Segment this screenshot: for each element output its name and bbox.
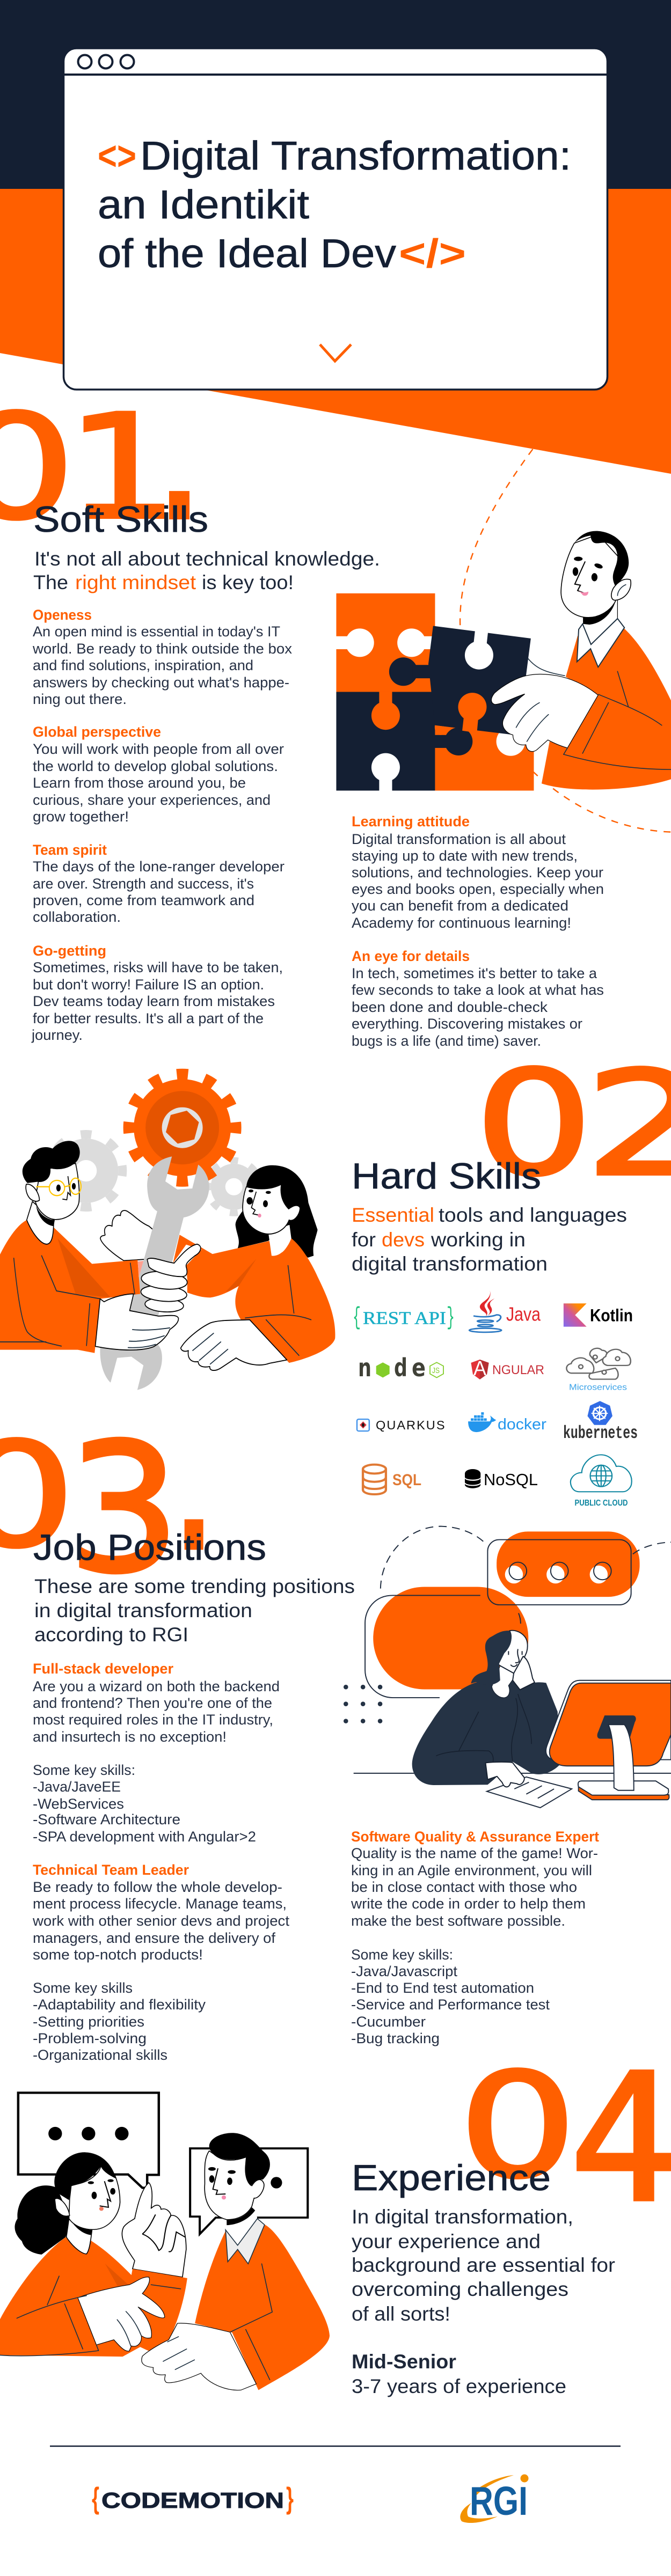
desk line bbox=[354, 1772, 671, 1774]
logo: kotlin: Kotlin bbox=[590, 1306, 633, 1325]
woman hand bbox=[486, 1762, 524, 1787]
icon: down chevron bbox=[320, 344, 351, 361]
block: team spirit bbox=[33, 842, 285, 925]
intro text: digital transformation bbox=[352, 1253, 548, 1275]
block: technical team leader: -Problem-solving bbox=[33, 2030, 147, 2046]
heading: experience: Experience bbox=[352, 2157, 551, 2198]
block: technical team leader: ment process lifecycle. Manage teams, bbox=[33, 1896, 287, 1912]
illustration: man with puzzle bbox=[335, 449, 671, 832]
raised hand bbox=[122, 2183, 186, 2277]
block: team spirit: proven, come from teamwork and bbox=[33, 892, 254, 908]
block: go-getting bbox=[31, 943, 283, 1043]
man neck bbox=[227, 2201, 257, 2245]
man neck shadow bbox=[227, 2207, 255, 2225]
woman sweater shadow bbox=[105, 2264, 132, 2287]
block: openess bbox=[32, 607, 293, 707]
block: openess: ning out there. bbox=[33, 691, 127, 707]
block: full-stack developer: Are you a wizard on both the backend bbox=[33, 1678, 280, 1694]
logo: docker: docker bbox=[498, 1416, 546, 1433]
intro text: right mindset bbox=[75, 571, 196, 593]
block: full-stack developer bbox=[33, 1661, 280, 1845]
block: global perspective: curious, share your experiences, and bbox=[33, 792, 271, 808]
gray gear left bbox=[49, 1134, 122, 1207]
intro text: is key too! bbox=[202, 571, 294, 593]
section number 01: . bbox=[154, 337, 205, 563]
man sweater bbox=[542, 628, 671, 790]
block: an eye for details: In tech, sometimes it's better to take a bbox=[352, 965, 597, 981]
logo: rest api: { bbox=[353, 1304, 361, 1332]
block: learning attitude: eyes and books open, especially when bbox=[352, 881, 604, 897]
man neck and collar bbox=[577, 600, 624, 667]
woman sleeve lines bbox=[0, 2276, 181, 2356]
block: technical team leader: some top-notch products! bbox=[33, 1947, 203, 1963]
block: software quality expert: write the code in order to help them bbox=[351, 1896, 586, 1912]
title text: <> bbox=[98, 133, 136, 178]
title text: an Identikit bbox=[98, 182, 309, 227]
block: full-stack developer: -SPA development with Angular>2 bbox=[33, 1829, 256, 1845]
back hand fingers bbox=[100, 1210, 154, 1260]
intro text: working in bbox=[431, 1229, 526, 1251]
block: software quality expert: king in an Agile environment, you will bbox=[351, 1862, 592, 1878]
block: openess: answers by checking out what's happe- bbox=[33, 674, 289, 691]
logo: sql: SQL bbox=[392, 1471, 421, 1489]
intro text: background are essential for bbox=[352, 2254, 615, 2276]
lower hand bbox=[95, 1294, 179, 1350]
title window bbox=[63, 48, 608, 390]
window buttons bbox=[78, 55, 134, 69]
logo: kubernetes: kubernetes bbox=[563, 1423, 638, 1443]
block: go-getting: journey. bbox=[31, 1027, 83, 1043]
woman hair bbox=[471, 1631, 512, 1685]
logo: microservices: Microservices bbox=[569, 1383, 627, 1392]
block: software quality expert: -Bug tracking bbox=[351, 2030, 440, 2046]
block: go-getting: Dev teams today learn from mistakes bbox=[33, 993, 275, 1009]
logo: rgi bbox=[460, 2475, 528, 2523]
intro text bbox=[34, 1575, 355, 1646]
woman body lines bbox=[436, 1694, 531, 1763]
block: global perspective: Learn from those around you, be bbox=[33, 775, 246, 791]
heading: soft skills: Soft Skills bbox=[33, 499, 208, 540]
logo: rgi: RGI bbox=[470, 2478, 528, 2523]
logo: sql bbox=[363, 1465, 421, 1494]
dot grid bbox=[344, 1685, 382, 1723]
logo: nodejs: d bbox=[394, 1353, 407, 1382]
pink accent bbox=[137, 1261, 143, 1276]
section number 02: 0 bbox=[475, 1040, 593, 1208]
man hand bbox=[142, 2323, 256, 2390]
block: an eye for details: been done and double-check bbox=[352, 999, 548, 1015]
man sleeve lines bbox=[516, 658, 671, 769]
intro text: Essential bbox=[352, 1204, 434, 1226]
block: software quality expert: -Service and Performance test bbox=[351, 1997, 550, 2013]
section number 03 bbox=[0, 1354, 218, 1612]
man collar bbox=[225, 2219, 265, 2264]
woman face bbox=[243, 1184, 300, 1234]
man neck shadow bbox=[36, 1205, 55, 1226]
illustration: woman at desk bbox=[344, 1526, 671, 1808]
intro text bbox=[352, 2206, 615, 2325]
logo: kotlin bbox=[564, 1303, 633, 1327]
block: global perspective bbox=[33, 724, 284, 825]
block: learning attitude: solutions, and technologies. Keep your bbox=[352, 864, 603, 880]
logo: nodejs: e bbox=[412, 1353, 426, 1382]
logo: angular: NGULAR bbox=[492, 1363, 544, 1377]
gray gear right bbox=[208, 1161, 260, 1213]
monitor stand bbox=[608, 1724, 634, 1790]
block: go-getting: for better results. It's all a part of the bbox=[33, 1010, 264, 1026]
woman body bbox=[412, 1680, 560, 1785]
intro text bbox=[33, 548, 380, 593]
seniority note: Mid-Senior bbox=[352, 2351, 456, 2373]
block: technical team leader: -Setting priorities bbox=[33, 2014, 144, 2030]
section: hard skills text bbox=[352, 1156, 627, 1275]
sweater shadow bbox=[57, 1238, 111, 1297]
puzzle: top-left orange piece bbox=[335, 593, 435, 692]
section: job positions text bbox=[32, 1527, 599, 2063]
logo: nodejs bbox=[358, 1353, 443, 1382]
block: go-getting: Sometimes, risks will have to be taken, bbox=[33, 959, 283, 975]
puzzle: bottom-right orange piece bbox=[435, 692, 534, 791]
block: team spirit: are over. Strength and success, it's bbox=[33, 876, 254, 892]
speech bubble outlines bbox=[365, 1526, 671, 1698]
intro text: It's not all about technical knowledge. bbox=[34, 548, 380, 570]
block: full-stack developer: Full-stack developer bbox=[33, 1661, 173, 1677]
section number 01: 1 bbox=[66, 384, 179, 551]
title text: of the Ideal Dev bbox=[98, 231, 397, 276]
intro text: your experience and bbox=[352, 2230, 541, 2252]
block: technical team leader: Some key skills bbox=[33, 1980, 133, 1996]
block: technical team leader: work with other senior devs and project bbox=[32, 1913, 290, 1929]
logo: public cloud: PUBLIC CLOUD bbox=[574, 1499, 628, 1508]
woman sweater shadow bbox=[225, 1259, 256, 1292]
footer divider bbox=[50, 2446, 621, 2447]
logo: quarkus: QUARKUS bbox=[376, 1418, 444, 1432]
title text: Digital Transformation: bbox=[140, 133, 571, 178]
orange pill left bbox=[373, 1587, 528, 1689]
title text bbox=[98, 133, 571, 276]
heading: job positions: Job Positions bbox=[33, 1527, 266, 1568]
woman neck bbox=[492, 1666, 514, 1698]
block: full-stack developer: and frontend? Then you're one of the bbox=[33, 1695, 272, 1711]
block: technical team leader: managers, and ensure the delivery of bbox=[33, 1930, 276, 1946]
man sleeve lines bbox=[163, 2264, 272, 2380]
man head bbox=[205, 2133, 270, 2220]
woman face bbox=[495, 1631, 528, 1674]
monitor base bbox=[578, 1781, 669, 1800]
block: software quality expert: Software Quality & Assurance Expert bbox=[351, 1829, 599, 1845]
heading: hard skills: Hard Skills bbox=[352, 1156, 541, 1197]
block: full-stack developer: most required roles in the IT industry, bbox=[33, 1712, 273, 1728]
logo: nosql bbox=[465, 1469, 538, 1489]
block: software quality expert: -Cucumber bbox=[351, 2014, 426, 2030]
logo: rest api bbox=[353, 1304, 455, 1332]
logo: rest api: REST API bbox=[363, 1308, 446, 1329]
section: experience text bbox=[352, 2157, 615, 2397]
block: software quality expert bbox=[351, 1829, 599, 2046]
section number 02 bbox=[475, 1040, 671, 1208]
section number 01 bbox=[0, 337, 205, 563]
block: learning attitude: Digital transformation is all about bbox=[352, 831, 566, 847]
header background bbox=[0, 0, 671, 474]
block: go-getting: Go-getting bbox=[33, 943, 106, 959]
lower hand lines bbox=[128, 1328, 170, 1348]
block: openess: Openess bbox=[33, 607, 92, 623]
orange gear bbox=[129, 1074, 236, 1181]
logo: nosql: NoSQL bbox=[484, 1470, 538, 1489]
intro text: In digital transformation, bbox=[352, 2206, 573, 2228]
woman clasp hand bbox=[78, 2277, 165, 2351]
logo: kubernetes bbox=[563, 1401, 638, 1443]
block: global perspective: Global perspective bbox=[33, 724, 161, 740]
logo: java bbox=[469, 1290, 541, 1332]
block: an eye for details: few seconds to take a look at what has bbox=[352, 982, 604, 998]
man neck bbox=[27, 1201, 54, 1244]
block: full-stack developer: -Java/JaveEE bbox=[33, 1779, 121, 1795]
man head bbox=[561, 531, 631, 618]
logo: nodejs: n bbox=[358, 1353, 371, 1382]
logo: microservices bbox=[566, 1348, 631, 1392]
intro text: of all sorts! bbox=[352, 2303, 450, 2325]
block: go-getting: but don't worry! Failure IS an option. bbox=[33, 977, 264, 993]
intro text: according to RGI bbox=[34, 1624, 188, 1646]
block: openess: and find solutions, inspiration, and bbox=[33, 657, 253, 673]
block: an eye for details bbox=[352, 948, 604, 1049]
man sleeve lines bbox=[0, 1256, 135, 1346]
logo: angular: A bbox=[473, 1357, 487, 1380]
intro text: in digital transformation bbox=[34, 1599, 252, 1621]
logo: codemotion: { bbox=[92, 2481, 99, 2515]
block: technical team leader: -Adaptability and flexibility bbox=[33, 1997, 206, 2013]
logos grid bbox=[353, 1290, 638, 1508]
logo: java: Java bbox=[506, 1303, 541, 1325]
speech bubble small bbox=[190, 2148, 308, 2234]
block: global perspective: You will work with people from all over bbox=[33, 741, 284, 757]
block: an eye for details: An eye for details bbox=[352, 948, 470, 964]
block: learning attitude: staying up to date with new trends, bbox=[352, 848, 578, 864]
puzzle: bottom-left navy piece bbox=[336, 692, 472, 791]
title text: </> bbox=[399, 231, 466, 276]
block: full-stack developer: -WebServices bbox=[33, 1796, 124, 1812]
block: software quality expert: -Java/Javascript bbox=[351, 1963, 457, 1979]
wrench handle over fingers bbox=[130, 1212, 184, 1316]
section number 04: 0 bbox=[458, 2043, 577, 2210]
logo: nodejs: JS bbox=[432, 1366, 440, 1375]
woman sleeve lines bbox=[193, 1266, 311, 1364]
intro text: devs bbox=[382, 1229, 425, 1251]
section number 03: . bbox=[170, 1354, 218, 1597]
illustration: gears background bbox=[49, 1074, 260, 1213]
block: technical team leader bbox=[32, 1862, 290, 2063]
woman head bbox=[54, 2152, 120, 2229]
block: learning attitude bbox=[352, 813, 604, 931]
speech bubble large bbox=[18, 2093, 159, 2188]
block: global perspective: the world to develop global solutions. bbox=[33, 758, 278, 774]
raised hand fingers bbox=[142, 2214, 185, 2252]
woman neck bbox=[67, 2219, 92, 2254]
intro text: tools and languages bbox=[439, 1204, 627, 1226]
section: soft skills text bbox=[31, 499, 604, 1049]
block: software quality expert: be in close contact with those who bbox=[351, 1879, 577, 1895]
block: openess: An open mind is essential in today's IT bbox=[33, 623, 280, 640]
block: technical team leader: -Organizational skills bbox=[33, 2047, 167, 2063]
block: full-stack developer: and insurtech is no exception! bbox=[33, 1729, 227, 1745]
block: team spirit: collaboration. bbox=[33, 909, 121, 925]
intro text bbox=[352, 1204, 627, 1275]
block: team spirit: Team spirit bbox=[33, 842, 107, 858]
woman face lines bbox=[508, 1649, 522, 1667]
intro text: for bbox=[352, 1229, 376, 1251]
block: software quality expert: Some key skills: bbox=[351, 1947, 453, 1963]
block: learning attitude: Academy for continuous learning! bbox=[352, 915, 571, 931]
illustration: two devs with wrench bbox=[0, 1141, 335, 1390]
logo: angular bbox=[471, 1357, 544, 1380]
block: full-stack developer: -Software Architecture bbox=[33, 1811, 180, 1828]
orange pill top bbox=[497, 1531, 640, 1597]
block: openess: world. Be ready to think outside the box bbox=[32, 641, 293, 657]
logo: docker bbox=[468, 1412, 546, 1433]
intro text: overcoming challenges bbox=[352, 2278, 568, 2300]
block: full-stack developer: Some key skills: bbox=[33, 1762, 135, 1778]
block: software quality expert: -End to End test automation bbox=[351, 1980, 534, 1996]
logo: rest api: } bbox=[447, 1304, 455, 1332]
fist fingers and thumb bbox=[141, 1244, 201, 1313]
block: software quality expert: Quality is the name of the game! Wor- bbox=[351, 1845, 598, 1861]
woman neck bbox=[268, 1225, 291, 1256]
section number 03: 3 bbox=[68, 1406, 180, 1612]
block: learning attitude: Learning attitude bbox=[352, 813, 470, 830]
paper bbox=[487, 1777, 572, 1808]
puzzle: tilted navy piece bbox=[389, 626, 531, 736]
block: global perspective: grow together! bbox=[33, 809, 129, 825]
block: software quality expert: make the best software possible. bbox=[351, 1913, 565, 1929]
woman sweater bbox=[0, 2237, 187, 2357]
woman neck shadow bbox=[70, 2219, 92, 2235]
intro text: The bbox=[33, 571, 68, 593]
man head bbox=[23, 1141, 81, 1220]
block: learning attitude: you can benefit from a dedicated bbox=[352, 898, 568, 914]
logo: public cloud bbox=[571, 1455, 632, 1508]
block: team spirit: The days of the lone-ranger developer bbox=[33, 858, 285, 875]
section number 04 bbox=[458, 2037, 671, 2241]
intro text: These are some trending positions bbox=[34, 1575, 355, 1597]
bubble dots bbox=[505, 1562, 611, 1583]
logo: codemotion: } bbox=[286, 2481, 294, 2515]
man sweater bbox=[0, 1220, 140, 1353]
woman hand bbox=[181, 1320, 287, 1370]
block: an eye for details: everything. Discovering mistakes or bbox=[352, 1016, 582, 1032]
woman hair back bbox=[236, 1165, 318, 1258]
speech bubble dots bbox=[48, 2127, 128, 2140]
block: technical team leader: Technical Team Leader bbox=[33, 1862, 189, 1878]
man sweater bbox=[195, 2225, 330, 2390]
logo: codemotion: CODEMOTION bbox=[101, 2488, 284, 2513]
small bubble dot bbox=[271, 2177, 282, 2189]
woman curly hair bbox=[14, 2185, 70, 2255]
seniority note bbox=[352, 2351, 566, 2397]
man hand bbox=[491, 674, 598, 752]
seniority note: 3-7 years of experience bbox=[352, 2375, 566, 2397]
wrench bbox=[100, 1156, 209, 1390]
block: technical team leader: Be ready to follow the whole develop- bbox=[33, 1879, 282, 1895]
woman sweater bbox=[173, 1235, 335, 1363]
block: an eye for details: bugs is a life (and time) saver. bbox=[352, 1033, 541, 1049]
logo: codemotion bbox=[92, 2481, 294, 2515]
woman arm bbox=[513, 1656, 535, 1690]
dashed arc bbox=[460, 449, 671, 832]
monitor bbox=[546, 1680, 671, 1766]
illustration: two people talking bbox=[0, 2093, 330, 2390]
